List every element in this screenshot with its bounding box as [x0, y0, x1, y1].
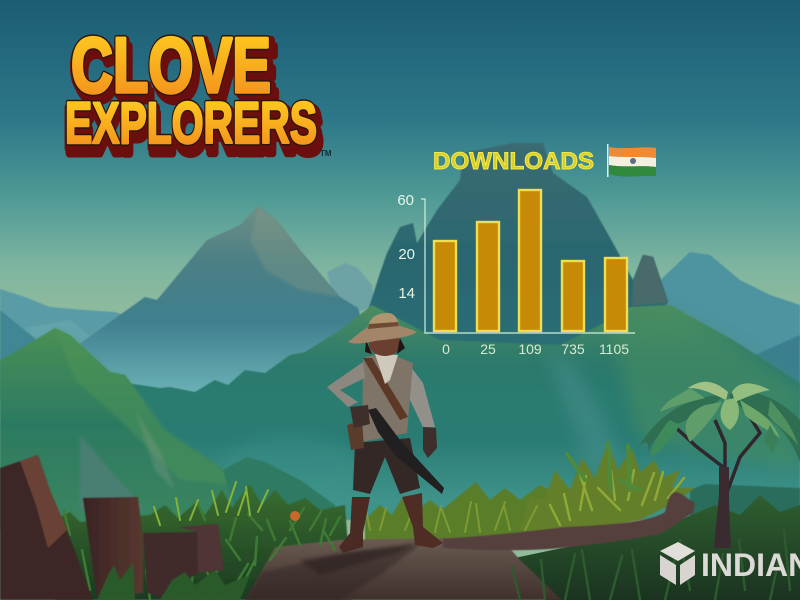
y axis labels [397, 192, 415, 302]
title extrusion: CLOVE [71, 23, 275, 111]
trunk base [714, 467, 731, 548]
face [369, 332, 401, 356]
torso vest [362, 352, 413, 442]
hair [365, 338, 405, 354]
rifle [368, 408, 444, 494]
hat band [368, 322, 399, 329]
x axis labels: 25 [480, 341, 496, 357]
bars [434, 190, 627, 331]
stump two [83, 497, 143, 597]
watermark logo [660, 542, 800, 585]
chart heading: DOWNLOADS [433, 148, 594, 175]
y axis labels: 60 [397, 192, 414, 209]
left green mountain [0, 328, 260, 530]
trousers [353, 438, 420, 494]
CLOVE fill thickening: CLOVE [71, 21, 271, 109]
trademark: TM [320, 149, 332, 158]
green band [609, 165, 656, 177]
title extrusion: EXPLORERS [65, 96, 321, 161]
far left stump [0, 455, 93, 600]
grass blades [64, 443, 790, 600]
EXPLORERS face: EXPLORERS [65, 91, 317, 156]
explorer character [300, 313, 444, 575]
belt pouch [347, 420, 364, 450]
stump four [178, 524, 224, 573]
title extrusion [65, 23, 322, 166]
grass ground right [505, 495, 800, 600]
y axis labels: 20 [398, 246, 415, 263]
axes [421, 199, 635, 333]
tree fronds [638, 382, 800, 462]
title extrusion: EXPLORERS [66, 101, 322, 166]
stump three [143, 532, 198, 597]
cube icon [660, 542, 695, 585]
central mountain sunlit face [250, 208, 340, 297]
hat crown [368, 313, 400, 330]
grass ground left [55, 484, 352, 600]
valley mist [220, 435, 360, 505]
title extrusion: CLOVE [74, 29, 278, 117]
hat brim [348, 324, 417, 344]
orange flower [290, 511, 300, 521]
trunk and branches [673, 417, 760, 492]
flag pole [607, 144, 608, 177]
far left stump highlight [20, 455, 67, 548]
grass ground centre [365, 482, 570, 545]
left arm [327, 362, 365, 407]
CLOVE face: CLOVE [71, 21, 271, 109]
bright grass mound [520, 442, 695, 535]
green foreground mountain range [127, 305, 800, 520]
saffron band [609, 147, 656, 158]
strap [363, 358, 408, 420]
right distant hill [690, 484, 800, 540]
foreground tufts [97, 563, 250, 600]
small hill [223, 457, 335, 525]
path shadow [245, 545, 420, 600]
dirt path [245, 537, 562, 600]
x axis labels: 735 [561, 341, 585, 357]
light mist streak [545, 350, 625, 470]
x axis labels: 1105 [599, 341, 629, 357]
central blue mountain [78, 206, 385, 400]
chakra [630, 158, 636, 164]
distant mountains [0, 252, 800, 400]
right arm [408, 363, 435, 427]
ground shadow [300, 543, 417, 575]
x axis labels [442, 341, 629, 357]
title logo [65, 21, 322, 166]
sunlit right slope [610, 310, 800, 470]
y axis labels: 14 [398, 285, 415, 302]
rock spire [632, 255, 668, 306]
hands [350, 405, 437, 458]
left boot [339, 497, 370, 553]
fallen log [443, 492, 695, 550]
shirt and tie [375, 354, 398, 384]
tree stumps group [0, 455, 224, 600]
x axis labels: 109 [518, 341, 542, 357]
palm tree [638, 382, 800, 548]
bar chart [397, 190, 635, 357]
x axis labels: 0 [442, 341, 450, 357]
EXPLORERS fill thickening: EXPLORERS [65, 91, 317, 156]
flag of India [607, 144, 656, 177]
right boot [402, 493, 443, 548]
white band [609, 156, 656, 167]
tall mountain behind chart [365, 143, 668, 380]
